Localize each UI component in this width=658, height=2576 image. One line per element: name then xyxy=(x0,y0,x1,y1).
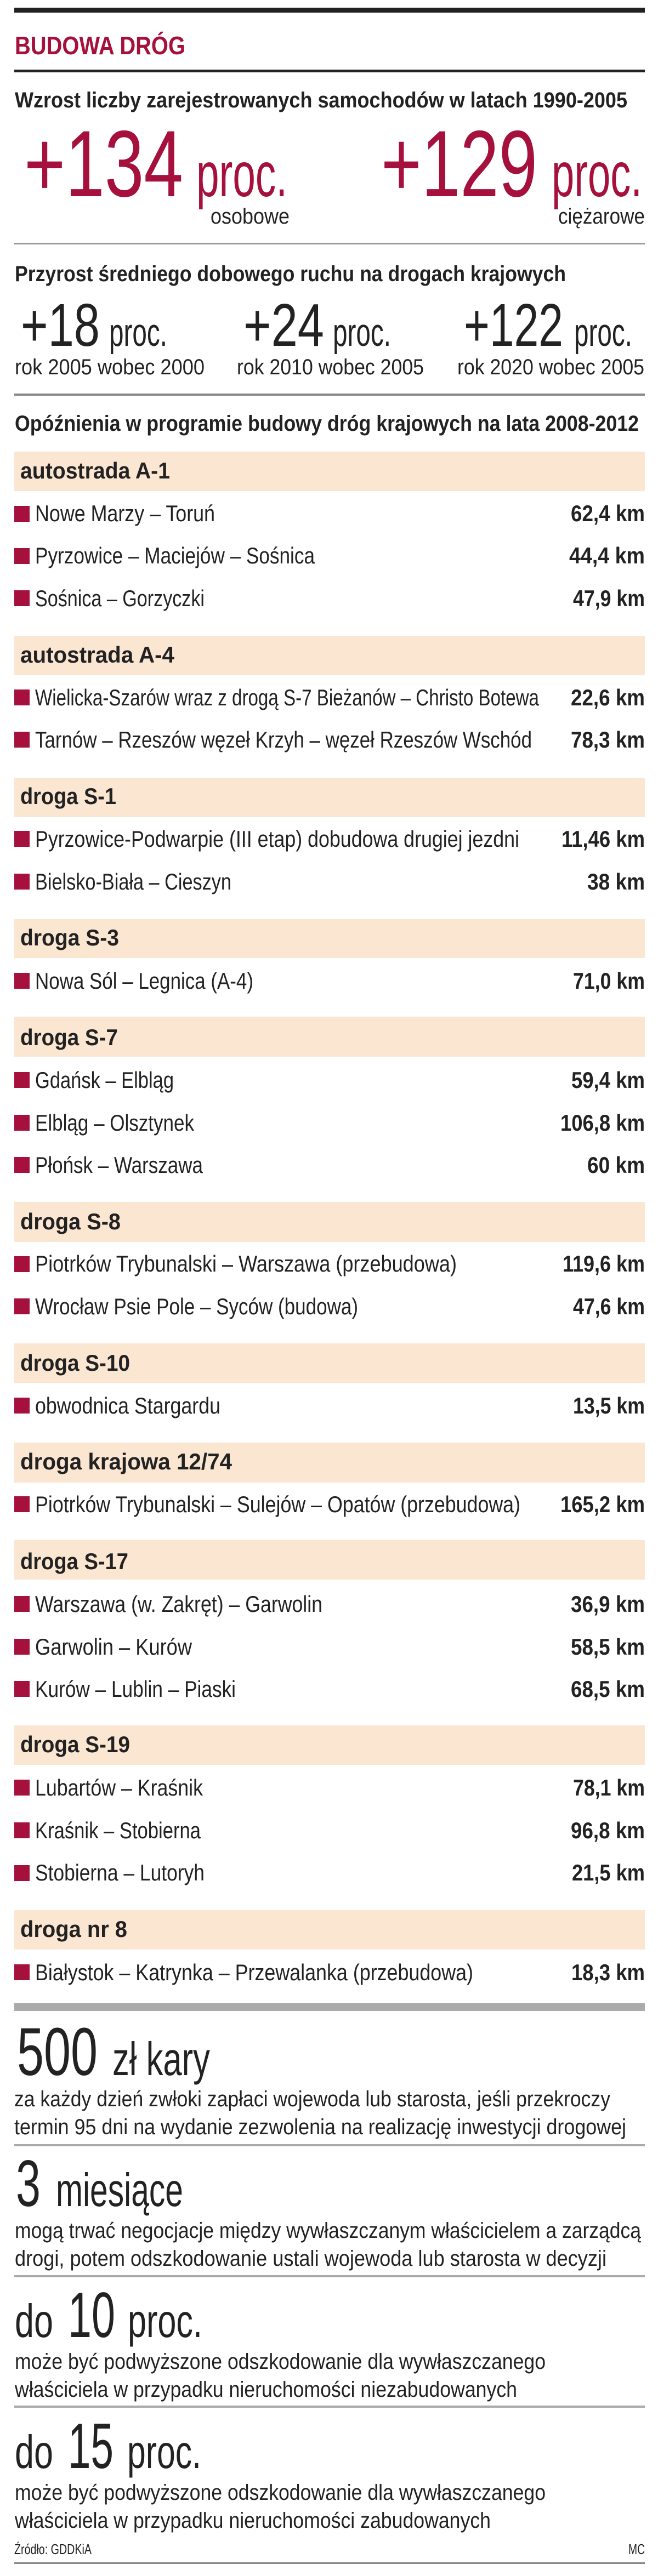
row: Kraśnik – Stobierna xyxy=(35,1817,201,1843)
figure xyxy=(15,2410,201,2482)
description xyxy=(14,2350,546,2402)
panel: droga krajowa 12/74 xyxy=(14,1443,645,1517)
band xyxy=(14,778,645,817)
row: Nowe Marzy – Toruń xyxy=(35,500,215,526)
panel: droga S-8 xyxy=(14,1202,645,1319)
row: Lubartów – Kraśnik xyxy=(35,1775,203,1800)
row: 18,3 km xyxy=(571,1959,645,1985)
description: może być podwyższone odszkodowanie dla wywłaszczanego xyxy=(15,2350,546,2374)
row: 60 km xyxy=(587,1152,645,1178)
description: drogi, potem odszkodowanie ustali wojewoda lub starosta w decyzji xyxy=(15,2247,606,2271)
description: może być podwyższone odszkodowanie dla wywłaszczanego xyxy=(15,2481,546,2505)
stat: trucks: ciężarowe xyxy=(558,204,645,229)
row: 47,9 km xyxy=(573,585,645,611)
panel: droga S-17 xyxy=(14,1540,645,1702)
row xyxy=(14,1817,645,1843)
row: obwodnica Stargardu xyxy=(35,1393,220,1418)
row: Elbląg – Olsztynek xyxy=(35,1110,195,1136)
panel: autostrada A-4 xyxy=(14,636,645,753)
band xyxy=(14,1017,645,1057)
row xyxy=(14,869,645,894)
panel: droga S-7 xyxy=(14,1017,645,1178)
panel: droga nr 8 xyxy=(14,1910,645,1985)
stat: 2020 vs 2005: +122 xyxy=(464,292,563,359)
row: 78,3 km xyxy=(571,727,645,753)
figure: 10 xyxy=(68,2279,115,2351)
row: Nowa Sól – Legnica (A-4) xyxy=(35,968,253,994)
figure: do xyxy=(15,2295,53,2347)
band xyxy=(14,452,645,491)
row xyxy=(14,1152,645,1178)
stat: 2020 vs 2005 xyxy=(457,292,644,379)
author: MC xyxy=(628,2541,645,2557)
row xyxy=(14,968,645,994)
row: Piotrków Trybunalski – Sulejów – Opatów (przebudowa) xyxy=(35,1491,520,1517)
row: Tarnów – Rzeszów węzeł Krzyh – węzeł Rzeszów Wschód xyxy=(35,727,532,753)
description xyxy=(15,2219,642,2271)
stat: 2010 vs 2005 xyxy=(237,292,424,379)
figure: 15 xyxy=(68,2410,114,2482)
row: Piotrków Trybunalski – Warszawa (przebudowa) xyxy=(35,1251,457,1276)
stat: passenger cars: osobowe xyxy=(211,204,290,229)
row: Sośnica – Gorzyczki xyxy=(35,585,205,611)
stat: passenger cars: proc. xyxy=(196,140,287,210)
row: Garwolin – Kurów xyxy=(35,1634,192,1660)
panel: droga S-1 xyxy=(14,778,645,894)
row: 59,4 km xyxy=(571,1067,645,1093)
row: Pyrzowice – Maciejów – Sośnica xyxy=(35,543,315,568)
band xyxy=(14,636,645,675)
row: 119,6 km xyxy=(563,1251,645,1276)
band xyxy=(14,1540,645,1580)
row xyxy=(14,543,645,568)
stat: passenger cars: +134 xyxy=(24,111,183,216)
band: droga S-1 xyxy=(20,783,116,809)
row: 36,9 km xyxy=(571,1591,645,1617)
figure: miesiące xyxy=(56,2164,183,2216)
figure xyxy=(16,2147,183,2220)
row xyxy=(14,1676,645,1702)
row: 38 km xyxy=(587,869,645,894)
figure: zł kary xyxy=(112,2033,210,2085)
panel: droga S-19 xyxy=(14,1725,645,1885)
figure: proc. xyxy=(127,2426,201,2478)
panel: up to 15 percent xyxy=(14,2410,546,2533)
band: droga S-17 xyxy=(20,1548,128,1574)
row xyxy=(14,1067,645,1093)
row xyxy=(14,1591,645,1617)
stat: 2010 vs 2005: proc. xyxy=(333,311,391,355)
stat: 2010 vs 2005: rok 2010 wobec 2005 xyxy=(237,355,424,379)
figure: do xyxy=(15,2426,53,2478)
row xyxy=(14,1634,645,1660)
row: 44,4 km xyxy=(569,543,645,568)
band: droga S-7 xyxy=(20,1024,118,1050)
stat: 2005 vs 2000: proc. xyxy=(109,311,167,355)
row: Płońsk – Warszawa xyxy=(35,1152,203,1178)
row: 71,0 km xyxy=(573,968,645,994)
band xyxy=(14,1910,645,1950)
title: BUDOWA DRÓG xyxy=(15,31,185,60)
row: Gdańsk – Elbląg xyxy=(35,1067,174,1093)
band: droga S-10 xyxy=(20,1350,130,1376)
band: droga S-19 xyxy=(20,1731,130,1757)
description xyxy=(14,2087,626,2139)
band: droga krajowa 12/74 xyxy=(20,1449,232,1474)
panel: droga S-3 xyxy=(14,919,645,994)
figure: proc. xyxy=(128,2295,202,2347)
row: 78,1 km xyxy=(573,1775,645,1800)
panel: registered vehicles growth xyxy=(15,88,645,229)
stat: 2005 vs 2000 xyxy=(15,292,205,379)
band xyxy=(14,1202,645,1242)
row: Pyrzowice-Podwarpie (III etap) dobudowa drugiej jezdni xyxy=(35,826,519,852)
stat: 2010 vs 2005: +24 xyxy=(243,292,324,359)
panel: daily traffic growth xyxy=(15,262,644,379)
source: Źródło: GDDKiA xyxy=(14,2541,92,2557)
panel: 500 zł fine xyxy=(14,2015,626,2139)
row xyxy=(14,1393,645,1418)
description xyxy=(14,2481,546,2533)
row xyxy=(14,1775,645,1800)
band xyxy=(14,919,645,958)
row: Wielicka-Szarów wraz z drogą S-7 Bieżanów – Christo Botewa xyxy=(35,685,539,710)
figure xyxy=(17,2015,210,2090)
figure xyxy=(15,2279,202,2351)
row: 62,4 km xyxy=(571,500,645,526)
band: autostrada A-1 xyxy=(20,458,170,483)
row: 58,5 km xyxy=(571,1634,645,1660)
stat: 2005 vs 2000: +18 xyxy=(21,292,100,359)
row: 165,2 km xyxy=(560,1491,645,1517)
band xyxy=(14,1725,645,1765)
band: droga S-8 xyxy=(20,1209,121,1234)
row xyxy=(14,1110,645,1136)
row: Kurów – Lublin – Piaski xyxy=(35,1676,236,1702)
heading: Przyrost średniego dobowego ruchu na drogach krajowych xyxy=(15,262,566,286)
row xyxy=(14,585,645,611)
panel: up to 10 percent xyxy=(14,2279,546,2402)
figure: 3 xyxy=(16,2147,41,2220)
band xyxy=(14,1343,645,1383)
row: Warszawa (w. Zakręt) – Garwolin xyxy=(35,1591,322,1617)
panel: droga S-10 xyxy=(14,1343,645,1418)
row: 22,6 km xyxy=(571,685,645,710)
description: właściciela w przypadku nieruchomości zabudowanych xyxy=(14,2509,491,2533)
panel: autostrada A-1 xyxy=(14,452,645,611)
row: Stobierna – Lutoryh xyxy=(35,1860,205,1885)
band: droga S-3 xyxy=(20,925,119,950)
row: Białystok – Katrynka – Przewalanka (przebudowa) xyxy=(35,1959,473,1985)
row: 21,5 km xyxy=(572,1860,645,1885)
stat: trucks: +129 xyxy=(381,111,537,216)
row: 96,8 km xyxy=(571,1817,645,1843)
row xyxy=(14,1860,645,1885)
row: 13,5 km xyxy=(573,1393,645,1418)
row: Wrocław Psie Pole – Syców (budowa) xyxy=(35,1293,358,1319)
row: 106,8 km xyxy=(560,1110,645,1136)
row: 11,46 km xyxy=(561,826,645,852)
band: autostrada A-4 xyxy=(20,642,175,668)
row: 47,6 km xyxy=(573,1293,645,1319)
row: 68,5 km xyxy=(571,1676,645,1702)
panel: 3 months xyxy=(15,2147,642,2271)
band: droga nr 8 xyxy=(20,1916,127,1942)
row: Bielsko-Biała – Cieszyn xyxy=(35,869,231,894)
row xyxy=(14,500,645,526)
stat: 2005 vs 2000: rok 2005 wobec 2000 xyxy=(15,355,205,379)
figure: 500 xyxy=(17,2015,98,2090)
row xyxy=(14,1293,645,1319)
description: właściciela w przypadku nieruchomości niezabudowanych xyxy=(14,2378,517,2402)
band xyxy=(14,1443,645,1483)
